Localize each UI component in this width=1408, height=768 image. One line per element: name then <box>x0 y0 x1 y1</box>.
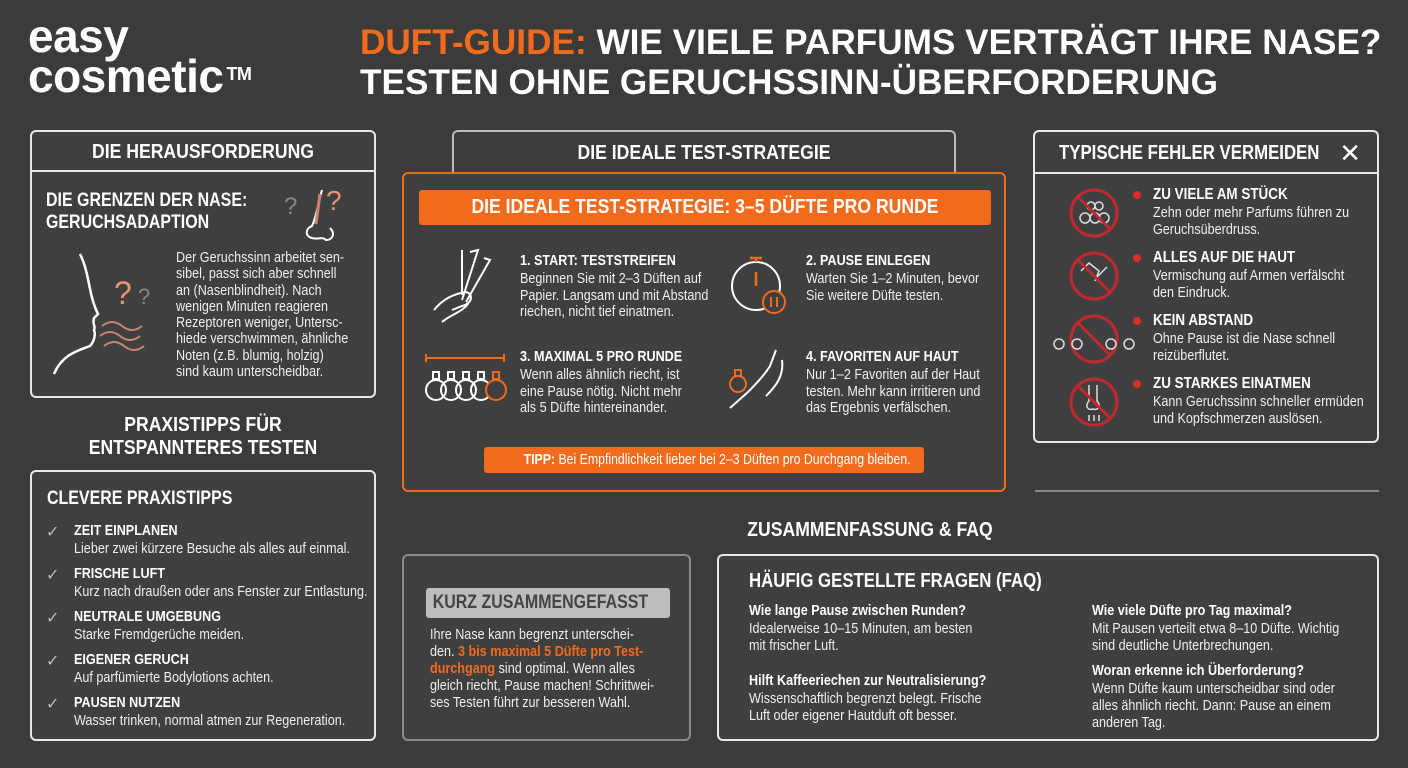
heading <box>1035 132 1377 174</box>
tips list: FRISCHE LUFT <box>74 565 165 582</box>
heading: HÄUFIG GESTELLTE FRAGEN (FAQ) <box>749 570 1042 592</box>
text block: hiede verschwimmen, ähnliche <box>176 330 348 347</box>
item 1: Papier. Langsam und mit Abstand <box>520 286 708 304</box>
tips list: Kurz nach draußen oder ans Fenster zur Entlastung. <box>74 583 367 600</box>
item 4: testen. Mehr kann irritieren und <box>806 382 980 400</box>
item 3 <box>425 348 682 416</box>
faq right: Woran erkenne ich Überforderung? <box>1092 662 1304 679</box>
icon: nose: ? <box>326 185 342 216</box>
logo: cosmeticTM <box>28 50 251 102</box>
title: DUFT-GUIDE: WIE VIELE PARFUMS VERTRÄGT IHRE NASE? <box>360 23 1381 62</box>
error list: ALLES AUF DIE HAUT <box>1153 249 1295 266</box>
tips list: ✓ <box>46 696 59 713</box>
heading: ✕ <box>1339 138 1361 168</box>
item 1: Beginnen Sie mit 2–3 Düften auf <box>520 270 701 287</box>
logo: easy <box>28 10 128 62</box>
item 4: Nur 1–2 Favoriten auf der Haut <box>806 366 980 383</box>
faq left: Wie lange Pause zwischen Runden? <box>749 602 966 619</box>
faq right: Wenn Düfte kaum unterscheidbar sind oder <box>1092 680 1335 697</box>
tips list: EIGENER GERUCH <box>74 651 189 668</box>
panel: typische fehler <box>1033 130 1379 443</box>
item 2: Warten Sie 1–2 Minuten, bevor <box>806 270 979 287</box>
faq left: mit frischer Luft. <box>749 637 839 654</box>
panel: test strategie <box>402 172 1006 492</box>
panel: kurz zusammengefasst <box>402 554 691 741</box>
icon: face profile: ? <box>138 284 150 309</box>
tips list: Starke Fremdgerüche meiden. <box>74 626 244 643</box>
text block: wenigen Minuten reagieren <box>176 298 328 315</box>
icon: face profile: ? <box>114 275 132 311</box>
item 3: als 5 Düfte hintereinander. <box>520 399 667 416</box>
tips list: NEUTRALE UMGEBUNG <box>74 608 221 625</box>
tips list: ✓ <box>46 524 59 541</box>
tips list: Auf parfümierte Bodylotions achten. <box>74 669 274 686</box>
tipp bar: TIPP: Bei Empfindlichkeit lieber bei 2–3 Düften pro Durchgang bleiben. <box>524 451 911 468</box>
logo <box>28 10 251 102</box>
item 3: Wenn alles ähnlich riecht, ist <box>520 366 679 383</box>
text block: sibel, passt sich aber schnell <box>176 265 336 282</box>
icon: nose <box>284 185 342 241</box>
title <box>360 23 1381 102</box>
faq right: sind deutliche Unterbrechungen. <box>1092 637 1273 654</box>
tab: center heading: DIE IDEALE TEST-STRATEGIE <box>578 142 830 164</box>
item 3: 3. MAXIMAL 5 PRO RUNDE <box>520 348 682 365</box>
heading <box>32 132 374 172</box>
item 2: 2. PAUSE EINLEGEN <box>806 252 930 269</box>
error list: reizüberflutet. <box>1153 347 1229 364</box>
orange banner: DIE IDEALE TEST-STRATEGIE: 3–5 DÜFTE PRO RUNDE <box>471 196 939 218</box>
item 2: Sie weitere Düfte testen. <box>806 286 943 304</box>
heading: DIE HERAUSFORDERUNG <box>92 141 314 163</box>
label: KURZ ZUSAMMENGEFASST <box>433 592 648 613</box>
label <box>426 588 670 618</box>
error list: Vermischung auf Armen verfälscht <box>1153 267 1344 284</box>
heading: praxistipps: PRAXISTIPPS FÜR <box>124 414 282 436</box>
text block: Der Geruchssinn arbeitet sen- <box>176 249 344 266</box>
error list: ZU STARKES EINATMEN <box>1153 375 1311 392</box>
item 4: das Ergebnis verfälschen. <box>806 399 951 416</box>
faq left: Hilft Kaffeeriechen zur Neutralisierung? <box>749 672 986 689</box>
faq right: anderen Tag. <box>1092 714 1165 731</box>
error list: Kann Geruchssinn schneller ermüden <box>1153 393 1364 410</box>
icon: test strips hand <box>433 248 492 323</box>
error list <box>1053 185 1364 427</box>
item 1: riechen, nicht tief einatmen. <box>520 303 674 320</box>
heading: praxistipps: ENTSPANNTERES TESTEN <box>89 437 317 459</box>
error list: Geruchsüberdruss. <box>1153 221 1260 238</box>
tipp bar <box>484 447 924 473</box>
text: Ihre Nase kann begrenzt unterschei- <box>430 626 634 643</box>
subheading: DIE GRENZEN DER NASE: <box>46 190 247 211</box>
faq left: Luft oder eigener Hautduft oft besser. <box>749 707 957 724</box>
tips list: ✓ <box>46 567 59 584</box>
faq left <box>749 602 986 724</box>
title: TESTEN OHNE GERUCHSSINN-ÜBERFORDERUNG <box>360 63 1218 102</box>
item 1: 1. START: TESTSTREIFEN <box>520 252 676 269</box>
heading: CLEVERE PRAXISTIPPS <box>47 488 232 509</box>
faq right: Wie viele Düfte pro Tag maximal? <box>1092 602 1292 619</box>
icon: 5 bottles <box>425 354 507 401</box>
panel: clevere praxistipps <box>30 470 376 741</box>
icon: hand with bottle <box>729 350 784 409</box>
tips list <box>46 522 367 729</box>
faq left: Wissenschaftlich begrenzt belegt. Frische <box>749 690 982 707</box>
faq right: Mit Pausen verteilt etwa 8–10 Düfte. Wichtig <box>1092 620 1339 637</box>
faq right <box>1092 602 1339 731</box>
text block: Rezeptoren weniger, Untersc- <box>176 314 343 331</box>
text block: an (Nasenblindheit). Nach <box>176 282 322 299</box>
item 4 <box>729 348 980 416</box>
heading: TYPISCHE FEHLER VERMEIDEN <box>1059 142 1319 164</box>
error list: und Kopfschmerzen auslösen. <box>1153 410 1323 427</box>
error list: Ohne Pause ist die Nase schnell <box>1153 330 1335 347</box>
error list: Zehn oder mehr Parfums führen zu <box>1153 204 1349 221</box>
text: durchgang sind optimal. Wenn alles <box>430 660 635 677</box>
tips list: ✓ <box>46 610 59 627</box>
error list: ZU VIELE AM STÜCK <box>1153 186 1288 203</box>
tips list: PAUSEN NUTZEN <box>74 694 180 711</box>
error list: den Eindruck. <box>1153 284 1230 301</box>
panel: die herausforderung <box>30 130 376 398</box>
error list: KEIN ABSTAND <box>1153 312 1253 329</box>
subheading <box>46 190 247 233</box>
tips list: Lieber zwei kürzere Besuche als alles auf einmal. <box>74 540 350 557</box>
faq right: alles ähnlich riecht. Dann: Pause an einem <box>1092 697 1331 714</box>
panel: faq <box>717 554 1379 741</box>
text block: Noten (z.B. blumig, holzig) <box>176 347 324 364</box>
item 3: eine Pause nötig. Nicht mehr <box>520 382 682 400</box>
icon: nose: ? <box>284 193 297 220</box>
text block <box>176 249 348 380</box>
text: gleich riecht, Pause machen! Schrittwei- <box>430 677 654 694</box>
heading: zusammenfassung: ZUSAMMENFASSUNG & FAQ <box>747 519 993 541</box>
icon: face profile <box>52 254 150 374</box>
subheading: GERUCHSADAPTION <box>46 212 209 233</box>
text: ses Testen führt zur besseren Wahl. <box>430 694 630 711</box>
item 1 <box>433 248 708 323</box>
text: den. 3 bis maximal 5 Düfte pro Test- <box>430 643 643 660</box>
orange banner <box>419 190 991 225</box>
item 2 <box>731 252 979 314</box>
faq left: Idealerweise 10–15 Minuten, am besten <box>749 620 972 637</box>
tips list: ZEIT EINPLANEN <box>74 522 178 539</box>
tab: center heading <box>452 130 956 174</box>
tips list: Wasser trinken, normal atmen zur Regeneration. <box>74 712 345 729</box>
heading: praxistipps <box>89 413 317 459</box>
text block: sind kaum unterscheidbar. <box>176 363 323 380</box>
tips list: ✓ <box>46 653 59 670</box>
item 4: 4. FAVORITEN AUF HAUT <box>806 348 959 365</box>
text <box>430 626 654 711</box>
